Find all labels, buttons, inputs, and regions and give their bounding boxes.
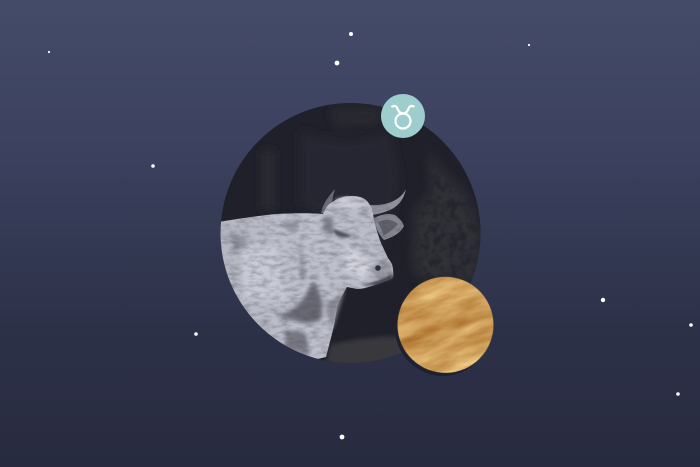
bull muzzle xyxy=(372,262,393,279)
bull shading xyxy=(228,198,372,355)
planet: Venus xyxy=(385,264,506,385)
bull body xyxy=(218,196,393,360)
zodiac badge: Taurus xyxy=(381,94,425,138)
bull horns xyxy=(321,189,335,214)
bull xyxy=(218,189,406,360)
bull ear xyxy=(374,214,404,240)
forest background xyxy=(215,98,485,368)
planet shadow xyxy=(395,280,491,376)
fir bush xyxy=(412,162,480,281)
bull eye xyxy=(333,229,352,237)
photo disc: bull in dark forest xyxy=(215,98,485,368)
Taurus glyph xyxy=(392,106,414,128)
grass xyxy=(326,336,402,363)
